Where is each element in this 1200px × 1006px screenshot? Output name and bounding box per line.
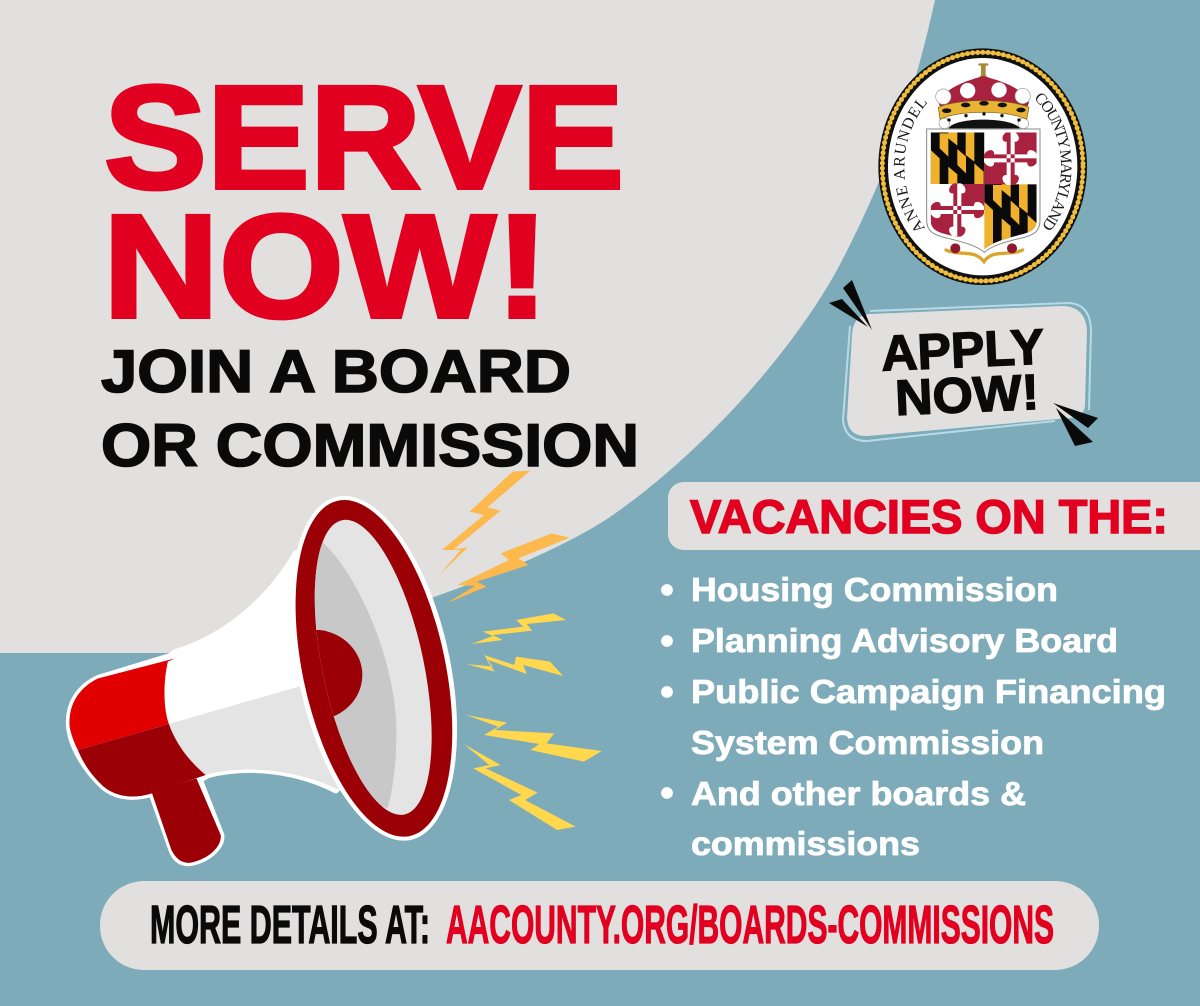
list of vacancies: Housing Commission xyxy=(691,571,1058,608)
grey curved panel xyxy=(0,0,935,653)
megaphone cone shading xyxy=(314,542,396,808)
vacancies heading bar xyxy=(668,482,1200,550)
callout badge xyxy=(843,303,1091,441)
icon: spark marks bottom xyxy=(1053,403,1098,446)
footer label: MORE DETAILS AT: xyxy=(150,895,430,955)
megaphone horn xyxy=(166,553,336,790)
seal lettering xyxy=(894,94,1072,230)
calvert lower quarter xyxy=(984,184,1037,251)
subtitle: join a board or commission xyxy=(101,338,639,479)
callout text xyxy=(880,319,1047,427)
title xyxy=(101,56,639,479)
callout: apply now xyxy=(829,280,1098,446)
title: serve now xyxy=(103,56,624,349)
seal lettering: COUNTY MARYLAND xyxy=(1036,94,1072,230)
megaphone rim xyxy=(263,483,485,854)
lightning bolts orange xyxy=(439,471,570,603)
title: serve now: SERVE xyxy=(104,56,624,220)
lightning bolts yellow xyxy=(464,613,602,830)
crossland lower quarter xyxy=(931,183,984,250)
icon: county seal xyxy=(878,48,1087,285)
seal scroll ornament xyxy=(946,243,1023,262)
megaphone rear shadow xyxy=(78,724,206,797)
vacancies heading: VACANCIES ON THE: xyxy=(690,490,1168,543)
callout text: NOW! xyxy=(894,364,1040,426)
megaphone horn shadow xyxy=(169,680,341,790)
megaphone rear xyxy=(69,658,175,750)
list of vacancies: Planning Advisory Board xyxy=(691,622,1118,659)
list of vacancies: And other boards & xyxy=(691,775,1026,812)
calvert quarter xyxy=(931,132,984,184)
subtitle: join a board or commission: OR COMMISSION xyxy=(101,412,639,479)
list of vacancies: System Commission xyxy=(691,724,1044,761)
list of vacancies: Public Campaign Financing xyxy=(691,673,1166,710)
list of vacancies: commissions xyxy=(691,825,920,862)
seal lettering: ANNE ARUNDEL xyxy=(894,100,928,230)
megaphone white outline xyxy=(69,553,371,863)
list of vacancies xyxy=(662,571,1166,862)
callout text: APPLY xyxy=(880,319,1045,382)
title: serve now: NOW! xyxy=(103,185,549,349)
seal shield xyxy=(927,129,1040,253)
megaphone speaker xyxy=(316,630,362,716)
illustration: megaphone xyxy=(69,471,602,863)
subtitle: join a board or commission: JOIN A BOARD xyxy=(101,338,571,405)
crossland upper quarter xyxy=(984,132,1037,185)
icon: spark marks top xyxy=(829,280,872,330)
seal crown xyxy=(936,63,1030,129)
megaphone handle xyxy=(152,778,221,863)
footer pill xyxy=(100,881,1099,970)
